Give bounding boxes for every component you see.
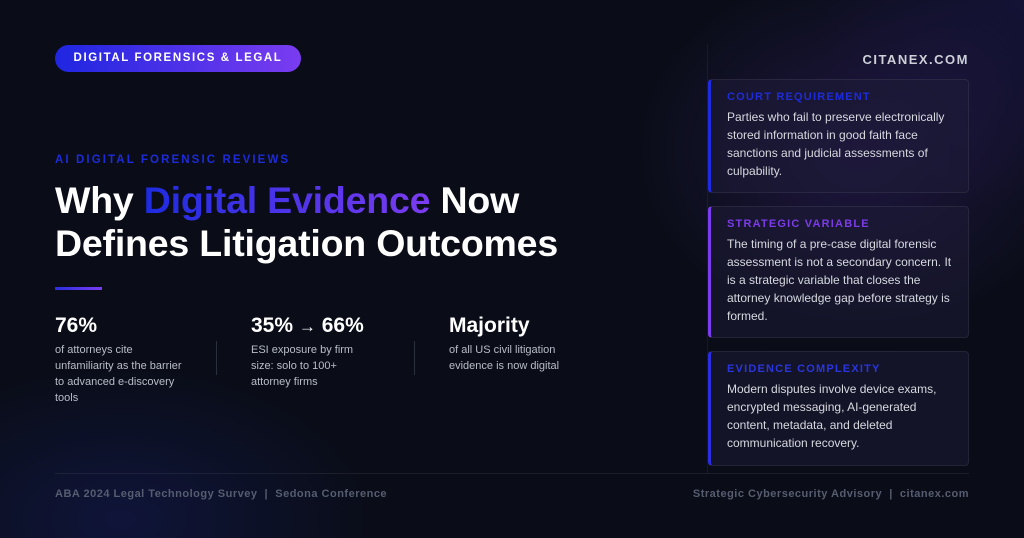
stat: 76% (55, 314, 182, 404)
stat: Majority (449, 314, 559, 372)
title: Why Digital Evidence Now (55, 179, 519, 221)
stat: 35% to 66%: ESI exposure by firm size: solo to 100+ attorney firms (251, 344, 353, 388)
card: court requirement (708, 79, 969, 193)
title: Defines Litigation Outcomes (55, 222, 558, 264)
card: court requirement: Parties who fail to preserve electronically stored information in good faith face sanctions and judicial assessments of culpability. (727, 110, 944, 178)
title (55, 179, 558, 264)
brand: CITANEX.COM (862, 52, 969, 67)
card: court requirement: COURT REQUIREMENT (727, 91, 871, 103)
card: evidence complexity: EVIDENCE COMPLEXITY (727, 363, 881, 375)
stat: 76%: of attorneys cite unfamiliarity as the barrier to advanced e-discovery tools (55, 344, 182, 404)
card: strategic variable (708, 206, 969, 338)
card: evidence complexity (708, 351, 969, 466)
stat: Majority: of all US civil litigation evidence is now digital (449, 344, 559, 372)
card: evidence complexity: Modern disputes involve device exams, encrypted messaging, AI-generated content, metadata, and deleted communication recovery. (727, 382, 936, 450)
stat: Majority: Majority (449, 314, 530, 337)
stat: 35% to 66%: 35% → 66% (251, 314, 364, 337)
footer sources: ABA 2024 Legal Technology Survey | Sedona Conference (55, 488, 387, 500)
footer brand: Strategic Cybersecurity Advisory | citanex.com (693, 488, 969, 500)
accent rule (55, 287, 102, 290)
tag pill (55, 45, 301, 72)
stat: 76%: 76% (55, 314, 97, 337)
stat: 35% to 66% (251, 314, 364, 388)
tag pill: DIGITAL FORENSICS & LEGAL (74, 52, 282, 64)
card: strategic variable: STRATEGIC VARIABLE (727, 218, 870, 230)
eyebrow subtitle: AI DIGITAL FORENSIC REVIEWS (55, 154, 290, 166)
card: strategic variable: The timing of a pre-case digital forensic assessment is not a secondary concern. It is a strategic variable that closes the attorney knowledge gap before strategy is formed. (727, 237, 951, 323)
